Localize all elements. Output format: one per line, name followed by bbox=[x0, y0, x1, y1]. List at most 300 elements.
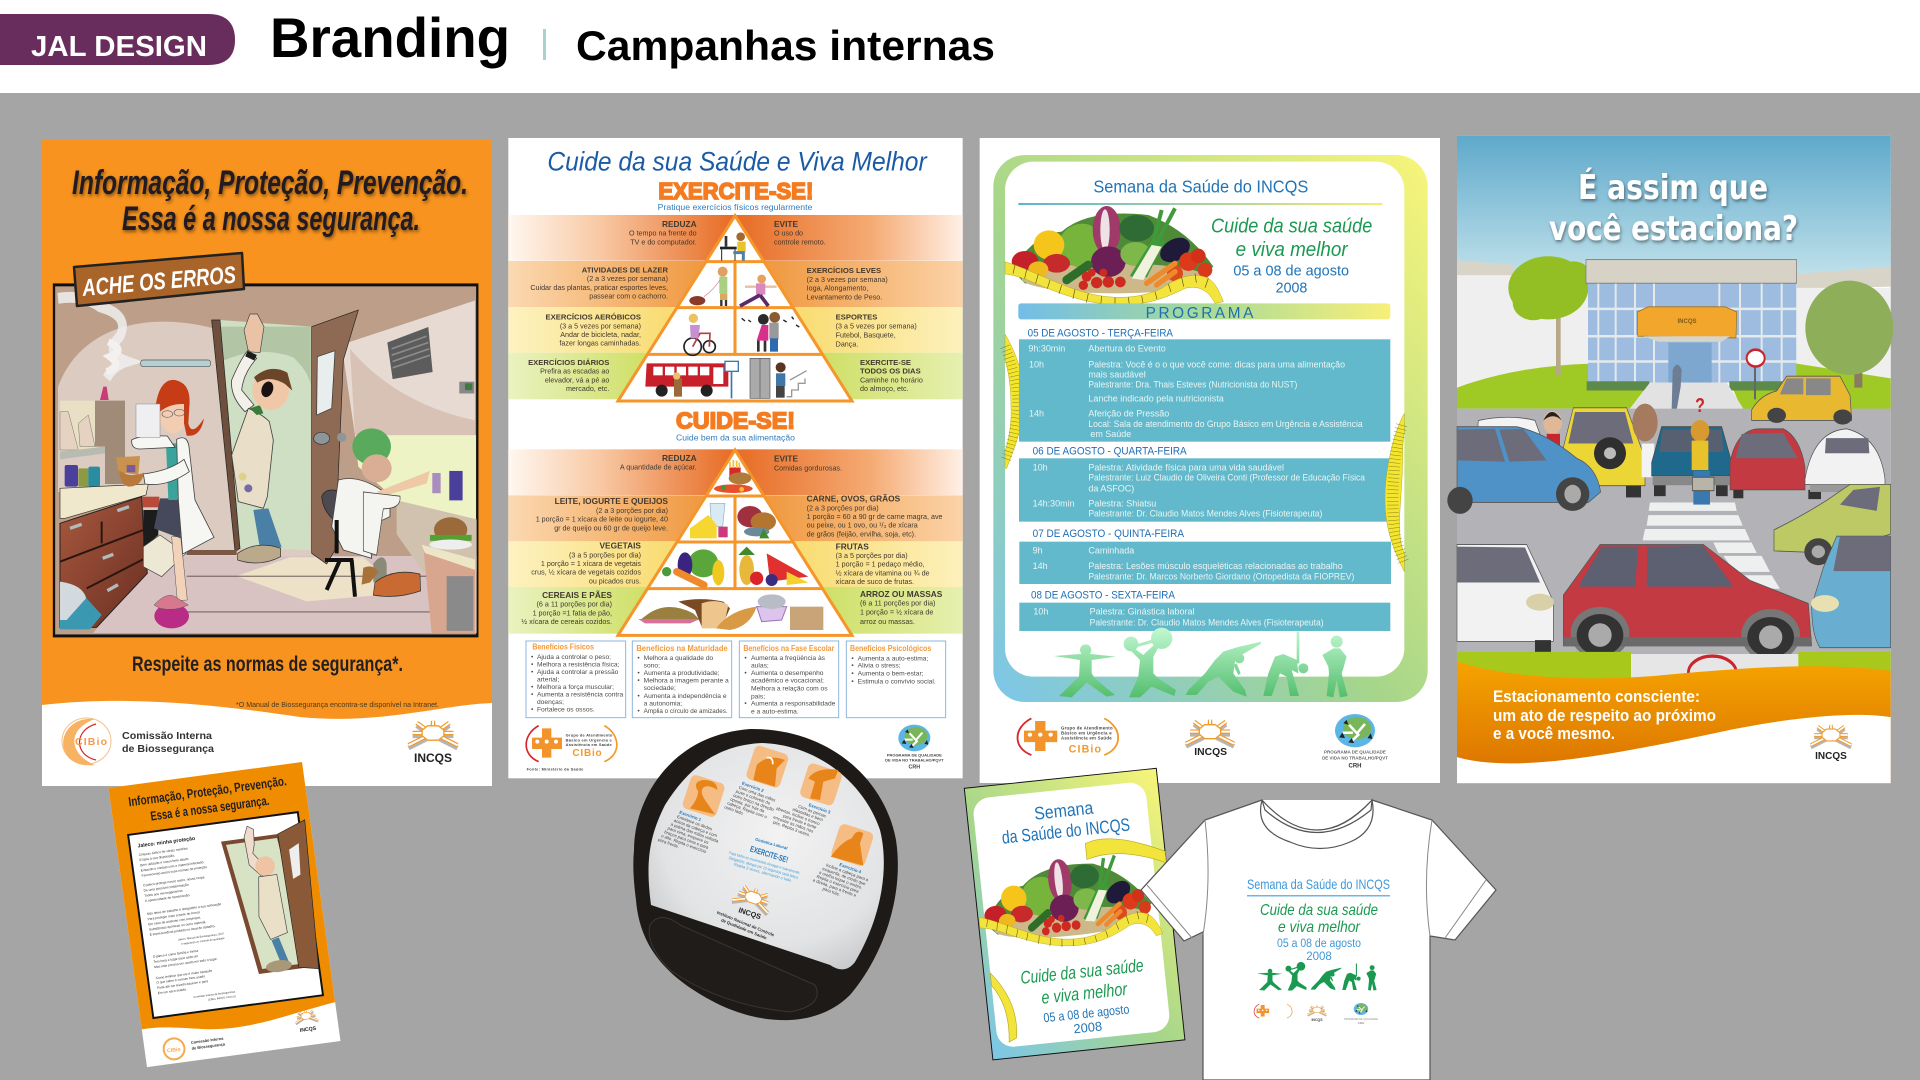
flyer white panel with poem and door: Evitando o contato com o material infectado, bbox=[141, 860, 205, 873]
food pyramid labels right: CARNE, OVOS, GRÃOS bbox=[807, 494, 901, 504]
box: school benefits: Aumenta o desempenho bbox=[751, 670, 824, 677]
mousepad centre title: EXERCITE-SE! bbox=[749, 844, 789, 865]
icon: exercise 2 bbox=[745, 744, 790, 789]
day 3 schedule bbox=[1019, 528, 1391, 584]
logo: quality of life programme: DE VIDA NO TRABALHO/PQVT bbox=[1322, 756, 1388, 761]
subheading food: Cuide bem da sua alimentação bbox=[676, 433, 795, 443]
exercise pyramid labels left: O tempo na frente do bbox=[629, 230, 697, 238]
day 3 schedule: 14h bbox=[1033, 561, 1048, 571]
box: physical benefits: Ajuda a controlar o peso; bbox=[537, 654, 611, 661]
day 3 schedule: Palestrante: Dr. Marcos Norberto Giordano (Ortopedista da FIOPREV) bbox=[1088, 571, 1354, 581]
gradient frame bbox=[993, 155, 1428, 702]
logo: CIBio bbox=[62, 718, 111, 765]
pyramid icon: stretching woman bbox=[740, 275, 777, 306]
woman in lab coat bbox=[116, 380, 214, 628]
logo: quality of life programme bbox=[885, 725, 944, 770]
programme bar bbox=[1018, 303, 1390, 322]
exercise pyramid labels left: Cuidar das plantas, praticar esportes leves, bbox=[530, 284, 668, 292]
exercise icons bbox=[681, 744, 875, 867]
exercise instructions: cabeça. Repita com o bbox=[727, 800, 768, 820]
flyer white panel with poem and door: Substâncias químicas ou outro material, bbox=[149, 920, 207, 932]
food pyramid labels right: (3 a 5 porções por dia) bbox=[836, 552, 908, 560]
day 2 schedule: da ASFOC) bbox=[1088, 483, 1134, 493]
flyer white panel with poem and door: A segurança no controle de qualidade bbox=[181, 936, 225, 946]
pyramid icon: cyclist bbox=[684, 314, 715, 355]
folder title bbox=[999, 794, 1131, 848]
flyer white panel with poem and door: Bem utilizado é nosso forte aliado bbox=[140, 857, 189, 867]
wooden sign: ACHE OS ERROS bbox=[74, 253, 244, 306]
box: maturity benefits: Melhora a qualidade do bbox=[644, 655, 714, 662]
t-shirt mockup bbox=[1141, 800, 1496, 1080]
flyer white panel with poem and door: Jaleco: Manual de Biossegurança, 2007 bbox=[178, 931, 225, 942]
folder title: Semana bbox=[1033, 798, 1095, 824]
footnote: *O Manual de Biossegurança encontra-se disponível na Intranet. bbox=[236, 700, 439, 709]
logo: quality of life programme: CRH bbox=[909, 764, 920, 770]
food pyramid labels left: REDUZA bbox=[662, 453, 697, 463]
exercise pyramid labels left: (2 a 3 vezes por semana) bbox=[587, 275, 668, 283]
food icon: meat and fish bbox=[737, 506, 776, 538]
poster 1 white footer bbox=[42, 701, 492, 786]
awareness message: e a você mesmo. bbox=[1493, 725, 1615, 743]
slogan and date bbox=[1211, 216, 1372, 297]
food pyramid labels right: xícara de suco de frutas. bbox=[836, 578, 914, 586]
logo: CIBio group: Básico em Urgência e bbox=[566, 737, 612, 742]
flyer white panel with poem and door: Tem hora e lugar para cada um bbox=[153, 954, 199, 964]
poster 4 headline bbox=[1549, 167, 1798, 249]
exercise pyramid labels right: (3 a 5 vezes por semana) bbox=[836, 322, 917, 330]
food pyramid labels right: 1 porção = 1 pedaço médio, bbox=[836, 561, 925, 569]
box: school benefits: • bbox=[744, 700, 747, 707]
box: school benefits: Melhora a relação com os bbox=[751, 686, 828, 693]
crosswalk bbox=[1643, 502, 1780, 589]
boy with briefcase bbox=[1691, 394, 1714, 505]
food pyramid labels right: 1 porção = ½ xícara de bbox=[860, 608, 933, 616]
box: physical benefits: doenças; bbox=[537, 699, 564, 706]
flyer logo: CIBio: Comissão Interna bbox=[191, 1036, 224, 1045]
shirt exercise silhouettes bbox=[1257, 962, 1377, 991]
slogan and date: Cuide da sua saúde bbox=[1211, 216, 1372, 238]
poster 3: health week programme bbox=[980, 138, 1440, 783]
INCQS building bbox=[1586, 260, 1797, 391]
left measuring tape bbox=[1005, 334, 1024, 468]
memo on wall bbox=[136, 404, 160, 437]
logo: INCQS bbox=[409, 721, 457, 765]
flyer white panel with poem and door: Todos aos microrganismos bbox=[144, 889, 183, 898]
pyramid icon: computer user bbox=[720, 232, 746, 261]
folder slogan bbox=[1019, 955, 1147, 1010]
comic illustration: lab scene bbox=[54, 285, 477, 636]
mousepad centre title: Ginástica Laboral bbox=[755, 837, 788, 851]
box: school benefits: • bbox=[744, 670, 747, 677]
pyramid icon: bus bbox=[645, 361, 738, 398]
mousepad centre title: Obrigatório: alongar por 10 segundos cada braço; bbox=[728, 855, 799, 880]
exercise pyramid bbox=[508, 215, 963, 401]
box: psychological benefits: • bbox=[851, 663, 854, 670]
exercise pyramid labels right: Ioga, Alongamento, bbox=[807, 285, 868, 293]
box: psychological benefits: • bbox=[851, 671, 854, 678]
box: physical benefits: • bbox=[531, 661, 534, 668]
subheading exercise: Pratique exercícios físicos regularmente bbox=[658, 202, 813, 212]
parking scene illustration bbox=[1447, 136, 1893, 783]
shelf unit with bottles bbox=[60, 387, 125, 487]
exercise instructions: o alto. Repita o exercício bbox=[661, 833, 708, 854]
logo: INCQS bbox=[1811, 725, 1851, 762]
logo: INCQS: INCQS bbox=[1815, 751, 1847, 762]
brand pill: JAL DESIGN: JAL DESIGN bbox=[31, 31, 207, 63]
food pyramid section bbox=[508, 449, 963, 635]
poster 1 headline: Essa é a nossa segurança. bbox=[122, 200, 420, 238]
box: maturity benefits: Aumenta a produtividade; bbox=[644, 670, 720, 677]
seated scientist bbox=[322, 428, 392, 597]
seated scientist right half bbox=[362, 471, 430, 596]
mousepad centre title: Faça todos os movimentos devagar e suavemente, bbox=[728, 850, 801, 875]
exercise instructions: abertas, incline o tronco bbox=[776, 806, 821, 826]
exercise pyramid labels right: Futebol, Basquete, bbox=[836, 331, 896, 339]
food pyramid labels left: (2 a 3 porções por dia) bbox=[596, 507, 668, 515]
food pyramid labels right: arroz ou massas. bbox=[860, 618, 915, 626]
logo: INCQS: INCQS bbox=[1194, 747, 1227, 758]
flyer white panel with poem and door: E lápis à sua disposição, bbox=[139, 853, 175, 862]
day 1 schedule: 14h bbox=[1029, 408, 1044, 418]
food pyramid labels left: crus, ½ xícara de vegetais cozidos bbox=[531, 569, 641, 577]
shirt slogan: e viva melhor bbox=[1278, 919, 1361, 936]
title: Branding: Branding bbox=[270, 6, 510, 69]
exercise instructions: para trás. bbox=[822, 886, 841, 897]
source note: Fonte: Ministério da Saúde bbox=[527, 768, 583, 772]
box: psychological benefits: Aumenta a auto-estima; bbox=[858, 656, 928, 663]
logo: quality of life programme: DE VIDA NO TRABALHO/PQVT bbox=[885, 757, 944, 762]
door and doorway bbox=[187, 310, 358, 564]
poster 1 headline bbox=[72, 164, 468, 238]
flyer logo: CIBio: de Biossegurança bbox=[191, 1041, 226, 1051]
exercise pyramid labels left: Prefira as escadas ao bbox=[540, 368, 609, 376]
box: physical benefits: arterial; bbox=[537, 677, 559, 684]
box: physical benefits: • bbox=[531, 692, 534, 699]
food icon: fast food bbox=[714, 460, 753, 493]
food pyramid labels right: (6 a 11 porções por dia) bbox=[860, 600, 935, 608]
flyer white panel with poem and door: Cinturas Jaleco de várias modelos bbox=[138, 846, 188, 857]
food pyramid labels left: 1 porção = 1 xícara de leite ou iogurte, 40 bbox=[536, 516, 668, 524]
box: physical benefits: • bbox=[531, 669, 534, 676]
vegetables and tape illustration bbox=[1005, 206, 1223, 305]
bucket bbox=[60, 582, 102, 629]
box: physical benefits: Benefícios Físicos bbox=[532, 642, 594, 651]
shirt title: Semana da Saúde do INCQS bbox=[1247, 876, 1390, 892]
exercise instructions: braços para cima e para bbox=[664, 829, 710, 850]
exercise instructions: Com uma das mãos bbox=[738, 785, 776, 803]
food icon: vegetables bbox=[662, 549, 724, 585]
poster 3 title: Semana da Saúde do INCQS bbox=[1093, 177, 1308, 197]
exercise instructions: Exercício 4 bbox=[839, 862, 862, 875]
day 2 schedule: Palestrante: Luiz Claudio de Oliveira Conti (Professor de Educação Física bbox=[1088, 473, 1365, 483]
exercise pyramid labels right bbox=[774, 219, 923, 393]
box: psychological benefits: • bbox=[851, 656, 854, 663]
box: maturity benefits: • bbox=[637, 693, 640, 700]
food icon: grains bbox=[638, 594, 823, 630]
box: school benefits: Aumenta a responsabilidade bbox=[751, 700, 836, 707]
shirt logos: PROGRAMA DE QUALIDADE bbox=[1344, 1018, 1378, 1021]
flyer white panel with poem and door: O que saber é comum bem usado bbox=[156, 974, 205, 985]
box: physical benefits: • bbox=[531, 654, 534, 661]
programme bar: PROGRAMA bbox=[1146, 305, 1254, 322]
flyer headline: Informação, Proteção, Prevenção. bbox=[127, 773, 288, 809]
counter and cabinet bbox=[60, 484, 148, 627]
benefit boxes bbox=[526, 641, 946, 772]
box: physical benefits bbox=[526, 641, 626, 718]
folder title: da Saúde do INCQS bbox=[1001, 815, 1131, 848]
left lab furniture, door and two scientists bbox=[60, 310, 392, 629]
poster 4 headline: você estaciona? bbox=[1549, 209, 1798, 249]
exercise pyramid labels left: (3 a 5 vezes por semana) bbox=[560, 322, 641, 330]
flyer white panel with poem and door: Em um saco selado. bbox=[158, 987, 187, 995]
day 1 schedule: Lanche indicado pela nutricionista bbox=[1088, 393, 1224, 403]
food pyramid labels right: Comidas gordurosas. bbox=[774, 464, 842, 472]
poster 2 title: Cuide da sua Saúde e Viva Melhor bbox=[547, 147, 928, 177]
exercise pyramid labels left: REDUZA bbox=[662, 219, 697, 229]
box: physical benefits: Fortalece os ossos. bbox=[537, 707, 595, 714]
folder slogan: e viva melhor bbox=[1040, 979, 1129, 1008]
exercise pyramid labels right: EXERCÍCIOS LEVES bbox=[807, 266, 881, 275]
flyer white panel with poem and door: Em caso de acidente com respingos, bbox=[148, 915, 201, 926]
day 2 schedule bbox=[1019, 446, 1390, 522]
awareness message: Estacionamento consciente: bbox=[1493, 688, 1700, 706]
exercise pyramid labels right: EXERCITE-SE bbox=[860, 358, 911, 367]
brand pill: JAL DESIGN bbox=[0, 14, 235, 65]
icon: exercise 1 bbox=[681, 774, 726, 818]
room backdrop bbox=[54, 285, 477, 636]
box: maturity benefits: a autonomia; bbox=[644, 701, 682, 708]
exercise instructions: para cima, empurre os bbox=[667, 825, 709, 845]
exercise pyramid labels left: Andar de bicicleta, nadar, bbox=[560, 331, 641, 339]
shirt logos: INCQS bbox=[1311, 1018, 1323, 1022]
mousepad centre title: Repita 3 vezes, alternando o lado bbox=[734, 862, 793, 883]
exercise pyramid labels right: O uso do bbox=[774, 230, 803, 238]
exercise instructions: pés. Repita 3 vezes. bbox=[772, 819, 811, 838]
food pyramid labels right: ARROZ OU MASSAS bbox=[860, 589, 943, 599]
logo: CIBio group: Assistência em Saúde bbox=[566, 742, 612, 747]
exercise pyramid labels right: TODOS OS DIAS bbox=[860, 366, 921, 375]
smoke bbox=[107, 342, 118, 372]
vegetable illustration bbox=[974, 849, 1163, 955]
box: psychological benefits: Alivia o stress; bbox=[858, 663, 901, 670]
exercise instructions: encostar as mãos nos bbox=[773, 815, 814, 834]
box: physical benefits: • bbox=[531, 707, 534, 714]
right measuring tape bbox=[1385, 413, 1404, 572]
shirt date: 2008 bbox=[1306, 951, 1332, 963]
committee name: de Biossegurança bbox=[122, 744, 214, 755]
mousepad logo: INCQS bbox=[716, 882, 776, 941]
flyer white panel with poem and door: O jaleco protege nosso corpo, nossa roupa bbox=[143, 875, 205, 887]
flyer white panel with poem and door: A oportunidade de transmissão. bbox=[145, 893, 191, 903]
flyer white panel with poem and door: Pode até ser levado aquecer e para bbox=[157, 979, 209, 990]
logo: quality of life programme: CRH bbox=[1349, 763, 1361, 769]
box: psychological benefits: Estimula o convívio social. bbox=[858, 678, 936, 685]
day 1 schedule: Palestrante: Dra. Thais Esteves (Nutricionista do NUST) bbox=[1088, 379, 1297, 389]
mousepad logo: INCQS: INCQS bbox=[737, 905, 762, 921]
shirt date: 05 a 08 de agosto bbox=[1277, 938, 1361, 950]
box: physical benefits: Melhora a força muscular; bbox=[537, 684, 614, 691]
flyer white panel with poem and door: Favorecendo assim suas normas de proteção. bbox=[141, 865, 208, 878]
committee name: Comissão Interna bbox=[122, 731, 212, 742]
box: maturity benefits: Melhora a imagem perante a bbox=[644, 678, 729, 685]
food pyramid labels left bbox=[521, 453, 697, 626]
exercise instructions: Com as pernas bbox=[797, 804, 827, 818]
box: school benefits: acadêmico e vocacional; bbox=[751, 678, 824, 685]
food icon: dairy bbox=[690, 503, 728, 538]
man in doorway bbox=[231, 314, 292, 563]
flyer headline bbox=[127, 773, 290, 826]
logo: CIBio group: Grupo de Atendimento bbox=[566, 733, 613, 738]
box: psychological benefits bbox=[846, 641, 946, 718]
food pyramid labels right: de grãos (feijão, ervilha, soja, etc). bbox=[807, 530, 916, 538]
day 3 schedule: 9h bbox=[1033, 546, 1043, 556]
box: school benefits: pais; bbox=[751, 693, 765, 700]
day 2 schedule: 14h:30min bbox=[1033, 499, 1075, 509]
flyer white panel with poem and door: O jaleco é como família e forma bbox=[153, 949, 199, 959]
day 1 schedule bbox=[1019, 327, 1390, 442]
slogan: Respeite as normas de segurança*. bbox=[132, 653, 403, 676]
exercise silhouettes bbox=[1054, 628, 1348, 697]
exercise instructions: esquerda, de modo que bbox=[822, 866, 867, 887]
logo: INCQS: INCQS bbox=[414, 751, 452, 765]
day 4 schedule: Palestra: Ginástica laboral bbox=[1090, 607, 1195, 617]
logo: quality of life programme bbox=[1322, 714, 1388, 769]
food pyramid labels left: 1 porção = 1 xícara de vegetais bbox=[541, 560, 641, 568]
back row cars bbox=[1447, 376, 1885, 514]
food pyramid labels left: gr de queijo ou 60 gr de queijo leve. bbox=[554, 524, 668, 532]
flyer white panel with poem and door: Jaleco: minha proteção bbox=[137, 836, 196, 850]
day 4 schedule: 08 DE AGOSTO - SEXTA-FEIRA bbox=[1031, 590, 1176, 602]
flyer logo: CIBio: CIBio bbox=[167, 1047, 181, 1054]
logo: CIBio group bbox=[1018, 718, 1118, 756]
exercise pyramid labels left: mercado, etc. bbox=[566, 385, 609, 393]
box: school benefits: Aumenta a freqüência às bbox=[751, 655, 826, 662]
food pyramid labels left: A quantidade de açúcar. bbox=[620, 464, 697, 472]
boy with briefcase: ? bbox=[1695, 394, 1705, 416]
flyer logo: INCQS: INCQS bbox=[299, 1026, 317, 1034]
slogan and date: e viva melhor bbox=[1236, 239, 1349, 261]
box: school benefits: e a auto-estima. bbox=[751, 708, 799, 715]
box: maturity benefits: • bbox=[637, 655, 640, 662]
top measuring tape bbox=[1085, 833, 1166, 871]
flyer white panel with poem and door: De uma possível contaminação bbox=[143, 883, 189, 893]
day 4 schedule bbox=[1019, 590, 1390, 631]
day 1 schedule: Aferição de Pressão bbox=[1088, 408, 1169, 418]
heading: CUIDE-SE: CUIDE-SE! bbox=[676, 407, 795, 433]
wooden sign: ACHE OS ERROS: ACHE OS ERROS bbox=[80, 262, 237, 302]
day 2 schedule: Palestra: Shiatsu bbox=[1088, 499, 1156, 509]
logo: CIBio: CIBio bbox=[75, 736, 107, 748]
logo: quality of life programme: PROGRAMA DE QUALIDADE bbox=[887, 753, 942, 758]
exercise pyramid labels right: Dança. bbox=[836, 340, 858, 348]
box: maturity benefits: sociedade; bbox=[644, 685, 676, 692]
shirt logos bbox=[1254, 1003, 1378, 1025]
exercise pyramid labels right: do almoço, etc. bbox=[860, 385, 909, 393]
flyer logo: INCQS bbox=[294, 1009, 320, 1034]
subtitle: Campanhas internas: Campanhas internas bbox=[576, 22, 995, 69]
day 3 schedule: Caminhada bbox=[1088, 546, 1134, 556]
flyer headline: Essa é a nossa segurança. bbox=[149, 793, 270, 824]
box: maturity benefits: Benefícios na Maturidade bbox=[636, 644, 728, 653]
logo: INCQS bbox=[1186, 720, 1234, 758]
exercise instructions: outro lado. bbox=[724, 804, 745, 816]
exercise instructions: a direita, para a frente e bbox=[812, 877, 858, 898]
exercise instructions: Repita o exercício para bbox=[816, 874, 860, 894]
exercise instructions: a palma das mãos voltada bbox=[670, 822, 720, 844]
food pyramid labels right: FRUTAS bbox=[836, 541, 869, 551]
day 1 schedule: Abertura do Evento bbox=[1088, 344, 1166, 354]
exercise pyramid labels left: fazer longas caminhadas. bbox=[559, 340, 641, 348]
exercise instructions: para frente. bbox=[657, 837, 680, 849]
box: maturity benefits: • bbox=[637, 708, 640, 715]
folder date bbox=[1043, 1001, 1131, 1039]
poster 4 headline: É assim que bbox=[1578, 167, 1768, 208]
exercise instructions: Exercício 1 bbox=[679, 810, 702, 822]
exercise instructions: oposta, por trás da bbox=[730, 796, 766, 814]
day 1 schedule: em Saúde bbox=[1090, 429, 1131, 439]
exercise instructions: outro braço na direção bbox=[732, 793, 775, 812]
heading: EXERCITE-SE: EXERCITE-SE! bbox=[658, 178, 813, 204]
food pyramid labels left: VEGETAIS bbox=[599, 541, 641, 551]
folder cover: Semana da Saúde bbox=[964, 768, 1185, 1060]
food pyramid labels left: 1 porção =1 fatia de pão, bbox=[533, 609, 612, 617]
leaflet: orange biosafety flyer bbox=[108, 762, 340, 1067]
box: maturity benefits: • bbox=[637, 670, 640, 677]
food pyramid labels right: EVITE bbox=[774, 454, 799, 464]
food pyramid labels left: ½ xícara de cereais cozidos. bbox=[521, 618, 612, 626]
mousepad centre title bbox=[728, 837, 801, 883]
day 2 schedule: 06 DE AGOSTO - QUARTA-FEIRA bbox=[1033, 446, 1187, 458]
box: psychological benefits: • bbox=[851, 678, 854, 685]
folder date: 2008 bbox=[1073, 1018, 1103, 1036]
mousepad logo: INCQS: Instituto Nacional de Controle bbox=[716, 910, 776, 938]
exercise pyramid labels left: TV e do computador. bbox=[630, 238, 697, 246]
day 3 schedule: 07 DE AGOSTO - QUINTA-FEIRA bbox=[1033, 528, 1185, 540]
food icon: fruit bbox=[738, 547, 808, 586]
flyer white panel with poem and door bbox=[128, 811, 329, 1018]
flyer white panel with poem and door: (CIBio, INCQS, Fiocruz) bbox=[208, 994, 236, 1002]
exercise pyramid labels right: Levantamento de Peso. bbox=[807, 293, 882, 301]
logo: CIBio group: CIBio bbox=[572, 748, 602, 759]
day 1 schedule: 10h bbox=[1029, 360, 1044, 370]
box: maturity benefits bbox=[632, 641, 732, 718]
pyramid icon: dog walker bbox=[689, 267, 728, 306]
exercise instructions: acima da cabeça e com bbox=[673, 818, 718, 838]
logo: CIBio group: Básico em Urgência e bbox=[1061, 730, 1112, 735]
exercise pyramid labels right: ESPORTES bbox=[836, 312, 877, 321]
food pyramid labels left: (6 a 11 porções por dia) bbox=[537, 601, 612, 609]
day 1 schedule: Local: Sala de atendimento do Grupo Básico em Urgência e Assistência bbox=[1088, 419, 1363, 429]
logo: CIBio group bbox=[526, 726, 617, 762]
exercise instructions: para frente e tente bbox=[782, 813, 818, 830]
exercise pyramid labels right: (2 a 3 vezes por semana) bbox=[807, 276, 888, 284]
flyer white panel with poem and door: Comissão Interna de Biossegurança bbox=[193, 989, 236, 999]
logo: quality of life programme: PROGRAMA DE QUALIDADE bbox=[1324, 750, 1386, 755]
poster 1: biosafety bbox=[42, 140, 492, 786]
exercise instructions: Exercício 3 bbox=[808, 802, 832, 815]
food pyramid labels right: ½ xícara de vitamina ou ¾ de bbox=[836, 569, 930, 577]
food pyramid labels left: CEREAIS E PÃES bbox=[542, 590, 612, 600]
poster 1 headline: Informação, Proteção, Prevenção. bbox=[72, 164, 468, 202]
slogan and date: 2008 bbox=[1276, 280, 1307, 297]
left tape bbox=[990, 971, 1018, 1043]
shirt date bbox=[1277, 938, 1361, 963]
exercise pyramid labels right: EVITE bbox=[774, 219, 799, 229]
poster 4: parking awareness bbox=[1447, 136, 1893, 783]
box: physical benefits: • bbox=[531, 684, 534, 691]
box: maturity benefits: Amplia o círculo de amizades. bbox=[644, 708, 728, 715]
food pyramid labels right: (2 a 3 porções por dia) bbox=[807, 504, 879, 512]
